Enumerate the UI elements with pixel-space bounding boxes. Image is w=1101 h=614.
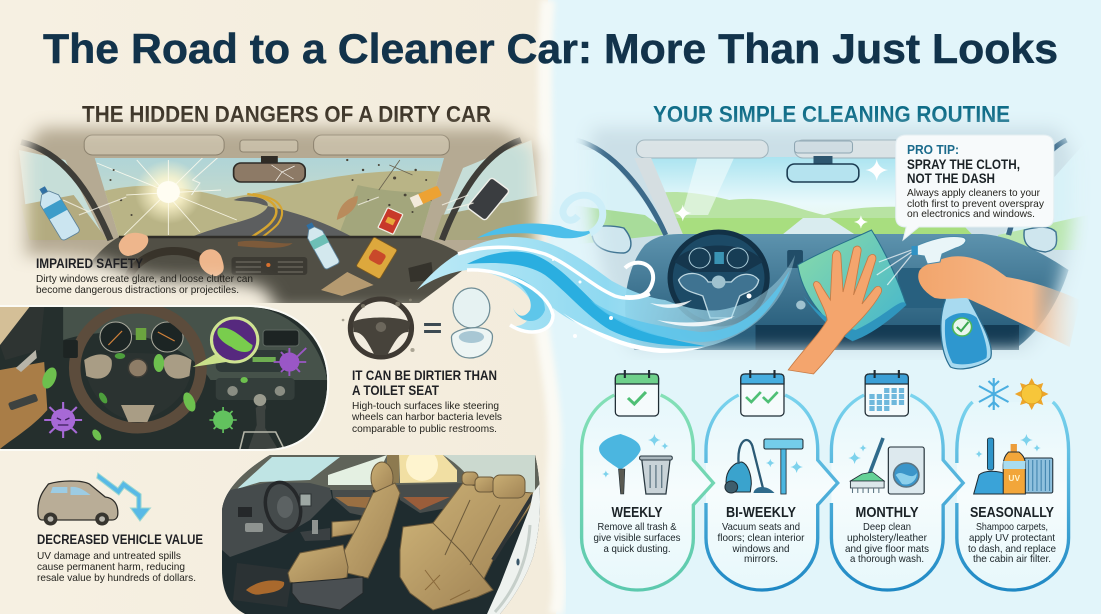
text: impaired safety: IMPAIRED SAFETY [36,256,143,271]
sparkles [674,159,888,229]
dashboard [625,234,1069,350]
text: decreased vehicle value [37,532,203,584]
spray head [912,237,966,264]
icon: equals sign [424,323,441,333]
water wave swoosh [417,195,795,353]
door panel [0,350,47,449]
icon: car with falling value arrow [38,473,150,526]
text: impaired safety [36,256,253,296]
text: weekly: give visible surfaces [594,532,680,544]
small swirl [625,263,653,297]
text: decreased vehicle value: cause permanent harm, reducing [37,561,185,573]
visors and console [84,135,449,155]
far seat cushion [332,520,360,537]
routine cards [582,370,1069,590]
wave second blue ribbon [590,270,790,342]
icon: dustpan UV bottle and filter [974,434,1053,494]
icon: dirty steering wheel equals toilet seat [342,288,492,358]
wave base body [417,237,795,350]
icon: steering wheel [342,299,415,357]
text: monthly: a thorough wash. [850,553,924,565]
cloth [798,230,906,341]
card: weekly [582,370,713,590]
text: dirtier than a toilet seat: High-touch surfaces like steering [352,400,499,412]
text: monthly: Deep clean [863,521,911,533]
callout: pro tip: NOT THE DASH [907,171,995,186]
text: bi-weekly [718,504,805,565]
mirrors [592,226,1057,253]
text: dirtier than a toilet seat: comparable to public restrooms. [352,423,497,435]
text: dirtier than a toilet seat [351,368,502,435]
callout: pro tip [896,135,1054,240]
text: seasonally: Shampoo carpets, [976,521,1048,533]
clear windshield view [645,155,977,235]
text: monthly: and give floor mats [845,543,929,555]
text: weekly: Remove all trash & [598,521,676,533]
callout: pro tip: on electronics and windows. [907,208,1035,220]
text: impaired safety: Dirty windows create glare, and loose clutter can [36,273,253,285]
magnified bacteria callout [193,318,258,367]
rear view mirror [234,156,305,182]
panel: clean interior scene [571,110,1098,360]
heading: hidden dangers: THE HIDDEN DANGERS OF A DIRTY CAR [82,101,491,127]
text: dirtier than a toilet seat: IT CAN BE DIRTIER THAN [352,368,497,383]
white door sill [487,484,540,614]
icon: duster and trash can [599,434,672,494]
text: bi-weekly: BI-WEEKLY [726,504,796,521]
text: seasonally: apply UV protectant [969,532,1055,544]
seat base [292,577,363,610]
text: dirtier than a toilet seat: wheels can harbor bacteria levels [351,411,502,423]
icon: dustpan UV bottle and filter: UV [1008,474,1021,483]
text: bi-weekly: windows and [732,543,790,555]
text: monthly: MONTHLY [856,504,918,521]
mist [877,250,912,285]
text: decreased vehicle value: resale value by hundreds of dollars. [37,572,196,584]
water droplets [552,259,752,338]
side windows [19,140,542,240]
heading: cleaning routine: YOUR SIMPLE CLEANING ROUTINE [653,101,1010,127]
text: seasonally: the cabin air filter. [973,553,1051,565]
center stack [63,330,299,449]
headliner visors and mirror [634,140,905,234]
lower white streak [563,313,705,353]
text: decreased vehicle value: DECREASED VEHICLE VALUE [37,532,203,547]
dashboard [222,478,332,557]
icon: vacuum and squeegee [725,439,803,494]
text: weekly: WEEKLY [612,504,662,521]
door cards [332,483,463,518]
text: seasonally [968,504,1056,565]
cloth folded edge [803,295,906,341]
germs [40,348,306,442]
front seat [288,462,400,585]
text: weekly: a quick dusting. [604,543,670,555]
callout: pro tip: Always apply cleaners to your [907,187,1040,199]
roof and windows [230,455,540,492]
text: bi-weekly: mirrors. [744,553,778,565]
hand [788,246,882,374]
panel: dirty steering wheel and germs [0,305,337,451]
wave white stripes [458,247,650,298]
card: bi-weekly [706,370,838,590]
text: decreased vehicle value: UV damage and untreated spills [37,550,181,562]
icon: calendar month [865,370,908,416]
text: monthly [845,504,929,565]
upper spiral [563,195,603,233]
bottle [941,267,991,369]
floor mat and stain [233,563,293,607]
side windows [571,140,1088,250]
text: monthly: upholstery/leather [847,532,927,544]
icon: car [38,481,118,526]
text: bi-weekly: Vacuum seats and [722,521,800,533]
panel: impaired safety scene [16,117,546,303]
text: dirtier than a toilet seat: A TOILET SEAT [352,383,440,398]
icon: calendar double check [741,370,784,416]
callout: pro tip: cloth first to prevent overspray [907,198,1045,210]
lower left swirl [467,270,553,332]
icon: brush and washing machine [848,438,924,494]
title: The Road to a Cleaner Car: More Than Just Looks [43,25,1058,72]
callout: pro tip: PRO TIP: [907,142,959,157]
windshield view [94,158,444,237]
icon: down arrow [97,473,150,521]
flying clutter [33,177,510,279]
text: bi-weekly: floors; clean interior [718,532,805,544]
text: seasonally: to dash, and replace [968,543,1056,555]
wave blue band [467,252,705,346]
card: seasonally [957,378,1069,590]
icon: calendar check [615,370,659,416]
rear seats [400,472,533,610]
panel: worn car interior [215,449,550,614]
right white streak [650,300,735,326]
upper streak [477,223,598,238]
callout: pro tip: SPRAY THE CLOTH, [907,157,1020,172]
steering wheel and hands [118,232,228,286]
clean steering wheel [670,232,767,324]
text: impaired safety: become dangerous distractions or projectiles. [36,284,239,296]
dash console [756,250,1019,350]
card: monthly [831,370,963,590]
icon: hand wiping with microfiber cloth [788,230,906,374]
gauges [100,322,183,352]
icon: hand with spray bottle [877,237,1080,369]
steering wheel [75,308,201,428]
icon: toilet [451,288,492,358]
icon: snowflake and sun [979,378,1049,410]
text: seasonally: SEASONALLY [970,504,1054,521]
dashboard [86,236,462,303]
text: weekly [594,504,680,555]
arm and hand [918,256,1080,347]
